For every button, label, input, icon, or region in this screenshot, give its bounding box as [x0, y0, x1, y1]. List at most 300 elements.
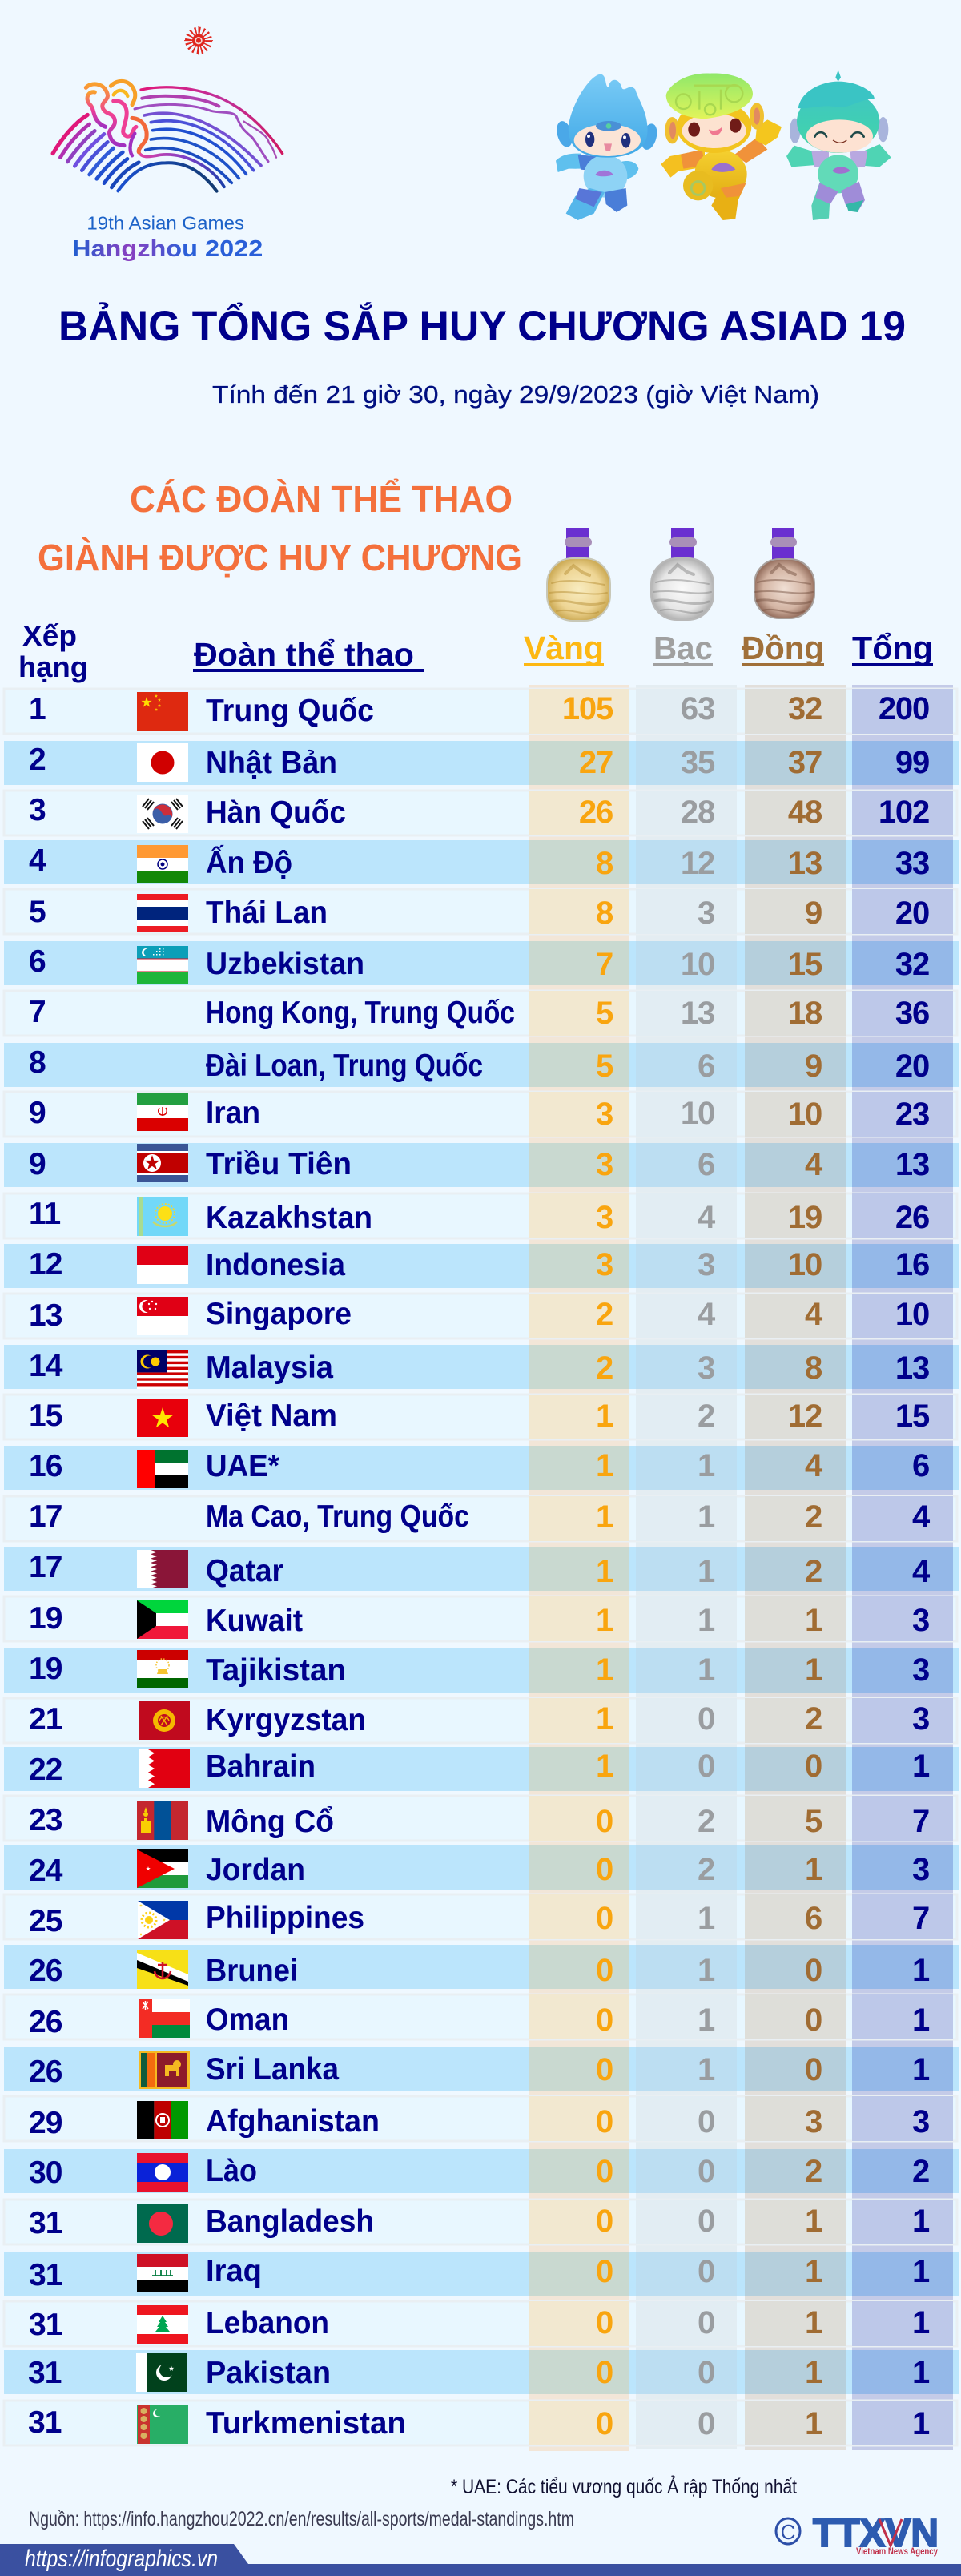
row: Pakistan: 0 [698, 2355, 714, 2390]
row: Singapore: 2 [596, 1297, 613, 1332]
row: UAE* [4, 1446, 959, 1490]
row: Việt Nam: 15 [29, 1399, 62, 1433]
row: Tajikistan: 1 [698, 1652, 715, 1688]
flag: Japan [137, 743, 188, 782]
row: Kazakhstan: 26 [895, 1200, 929, 1235]
flag: Brunei [137, 1950, 188, 1989]
row: Bangladesh: Bangladesh [206, 2204, 374, 2239]
row: Sri Lanka: 26 [29, 2055, 62, 2089]
flag: Singapore [137, 1297, 188, 1335]
row: Indonesia: 16 [895, 1247, 929, 1282]
row: Singapore: 13 [29, 1298, 62, 1333]
flag: Turkmenistan [137, 2405, 188, 2444]
row: Việt Nam: 2 [698, 1399, 714, 1434]
row: Ấn Độ: Ấn Độ [206, 845, 292, 880]
row: Indonesia: 3 [698, 1247, 714, 1282]
flag: Vietnam [137, 1399, 188, 1437]
row: Bangladesh: 0 [698, 2204, 714, 2239]
row: Kyrgyzstan: 1 [596, 1701, 613, 1737]
row: Bahrain: 0 [698, 1749, 714, 1784]
row: Iran: 23 [895, 1097, 929, 1132]
row: UAE*: 1 [698, 1448, 715, 1483]
row: Iraq: 0 [698, 2254, 714, 2289]
row: Lebanon: 0 [596, 2305, 613, 2341]
row: Lào: 2 [805, 2154, 822, 2189]
row: Trung Quốc: 1 [29, 692, 46, 727]
row: Sri Lanka: Sri Lanka [206, 2052, 339, 2087]
flag: Pakistan [136, 2353, 187, 2392]
row: Kyrgyzstan: 2 [805, 1701, 822, 1737]
row: Việt Nam [4, 1395, 957, 1439]
row: Kyrgyzstan: Kyrgyzstan [206, 1703, 366, 1737]
row: Afghanistan: 3 [805, 2104, 822, 2139]
heading: các đoàn thể thao giành được huy chương [38, 478, 522, 578]
row: Singapore: 10 [895, 1297, 929, 1332]
row: Afghanistan: 0 [698, 2104, 714, 2139]
flag: Bahrain [139, 1749, 190, 1788]
row: Hàn Quốc: 28 [681, 795, 715, 830]
row: Mông Cổ: 5 [805, 1804, 822, 1839]
row: Philippines: 0 [596, 1901, 613, 1936]
table header: Xếp hạng [18, 619, 88, 683]
row: Indonesia: 3 [596, 1247, 613, 1282]
row: Iraq: 1 [805, 2254, 822, 2289]
flag: Philippines [138, 1901, 188, 1939]
row: Iraq: 0 [596, 2254, 613, 2289]
row: Kyrgyzstan: 0 [698, 1701, 714, 1737]
table header: Vàng: Vàng [524, 630, 604, 666]
medal table [4, 689, 959, 2445]
row: Ma Cao, Trung Quốc: Ma Cao, Trung Quốc [206, 1499, 469, 1534]
row: Sri Lanka: 1 [698, 2052, 715, 2087]
row: Sri Lanka: 0 [805, 2052, 822, 2087]
row: Turkmenistan: 1 [805, 2406, 822, 2441]
row: Hàn Quốc [4, 791, 957, 835]
row: Malaysia: Malaysia [206, 1350, 333, 1385]
row: Nhật Bản [4, 741, 959, 785]
row: Uzbekistan: 32 [895, 947, 929, 982]
row: Brunei: 1 [698, 1953, 715, 1988]
row: Đài Loan, Trung Quốc [4, 1043, 959, 1087]
row: Iran: 3 [596, 1097, 613, 1132]
column backgrounds: medals [529, 685, 953, 2451]
row: Sri Lanka: 1 [912, 2052, 930, 2087]
row: Turkmenistan [4, 2401, 957, 2445]
row: Kyrgyzstan: 3 [912, 1701, 929, 1737]
row: Turkmenistan: Turkmenistan [206, 2406, 406, 2441]
row: Malaysia: 2 [596, 1350, 613, 1386]
row: Tajikistan: 1 [805, 1652, 822, 1688]
icon: silver medal [651, 528, 714, 620]
row: Philippines: 25 [29, 1904, 62, 1938]
heading: các đoàn thể thao giành được huy chương: GIÀNH ĐƯỢC HUY CHƯƠNG [38, 537, 522, 578]
row: Afghanistan: 0 [596, 2104, 613, 2139]
row: Tajikistan: Tajikistan [206, 1653, 346, 1688]
row: Thái Lan: 20 [895, 896, 929, 931]
row: Thái Lan: 3 [698, 896, 714, 931]
row: Malaysia: 14 [29, 1349, 63, 1383]
row: Kazakhstan: 4 [698, 1200, 716, 1235]
table header: Xếp hạng: hạng [18, 650, 88, 683]
flag: South Korea [137, 795, 188, 833]
row: Qatar: Qatar [206, 1554, 283, 1588]
row: Lebanon: 31 [29, 2308, 62, 2342]
row: Bahrain: Bahrain [206, 1749, 316, 1784]
row: Thái Lan: 8 [596, 896, 613, 931]
row: Việt Nam: 1 [596, 1399, 613, 1434]
row: Malaysia: 8 [805, 1350, 822, 1386]
row: Ma Cao, Trung Quốc: 17 [29, 1499, 62, 1534]
row: Jordan: 2 [698, 1852, 714, 1887]
mascot: yellow Congcong [661, 73, 782, 220]
row: Jordan: Jordan [206, 1853, 305, 1887]
footnote: UAE: * UAE: Các tiểu vương quốc Ả rập Thống nhất [451, 2474, 797, 2498]
row: Hàn Quốc: 102 [879, 795, 929, 830]
row: Philippines: 7 [912, 1901, 929, 1936]
row: Trung Quốc: 200 [879, 691, 929, 727]
source: Nguồn: https://info.hangzhou2022.cn/en/results/all-sports/medal-standings.htm [29, 2508, 574, 2530]
row: Iran: 10 [681, 1096, 714, 1131]
row: Malaysia [4, 1345, 959, 1389]
title: BẢNG TỔNG SẮP HUY CHƯƠNG ASIAD 19 [58, 301, 906, 350]
row: UAE*: UAE* [206, 1449, 280, 1483]
row: Oman: 0 [805, 2002, 822, 2038]
row: Singapore [4, 1294, 957, 1338]
row: Việt Nam: 15 [895, 1399, 930, 1434]
row: Brunei [4, 1945, 959, 1989]
website url: https://infographics.vn [25, 2546, 218, 2572]
logo: TTXVN: C [781, 2520, 795, 2544]
row: Đài Loan, Trung Quốc: 6 [698, 1049, 714, 1084]
row: Mông Cổ: 0 [596, 1804, 613, 1839]
row: Uzbekistan: 7 [596, 947, 613, 982]
row: Kuwait: 1 [805, 1603, 822, 1638]
row: Oman: 1 [698, 2002, 715, 2038]
row: Iran: 9 [29, 1096, 46, 1130]
row: Hong Kong, Trung Quốc [4, 991, 957, 1036]
row: Kazakhstan: Kazakhstan [206, 1201, 372, 1235]
row: Bahrain: 1 [912, 1749, 930, 1784]
row: Brunei: 0 [596, 1953, 613, 1988]
row: Iraq: Iraq [206, 2254, 262, 2288]
row: Malaysia: 13 [895, 1350, 929, 1386]
row: Tajikistan [4, 1648, 959, 1693]
row: Kuwait [4, 1596, 957, 1641]
row: Kuwait: 1 [596, 1603, 613, 1638]
row: Jordan: 3 [912, 1852, 929, 1887]
row: Lào: 2 [912, 2154, 929, 2189]
row: Oman: 1 [912, 2002, 930, 2038]
row: Kazakhstan: 19 [788, 1200, 822, 1235]
row: Lào [4, 2149, 959, 2193]
row: Uzbekistan: 15 [788, 947, 822, 982]
row: Qatar: 1 [596, 1554, 613, 1589]
row: Tajikistan: 1 [596, 1652, 613, 1688]
logo: 19th Asian Games Hangzhou 2022 [53, 26, 283, 262]
row: Afghanistan [4, 2096, 957, 2141]
row: Kazakhstan: 3 [596, 1200, 613, 1235]
row: Afghanistan: 3 [912, 2104, 929, 2139]
row: Mông Cổ: 2 [698, 1804, 714, 1839]
row: Việt Nam: 12 [788, 1399, 822, 1434]
flag: Laos [137, 2153, 188, 2192]
row: Bahrain: 0 [805, 1749, 822, 1784]
row: Hàn Quốc: 3 [29, 793, 46, 827]
flag: Mongolia [137, 1801, 188, 1840]
row: Iran: 10 [788, 1097, 822, 1132]
row: Ma Cao, Trung Quốc: 1 [596, 1499, 613, 1535]
row: Hàn Quốc: 26 [579, 795, 613, 830]
row: Đài Loan, Trung Quốc: 8 [29, 1045, 46, 1080]
row: Afghanistan: Afghanistan [206, 2104, 380, 2139]
row: Jordan: 0 [596, 1852, 613, 1887]
row: Iran [4, 1092, 957, 1137]
row: Bahrain: 1 [596, 1749, 613, 1784]
row: Oman: 0 [596, 2002, 613, 2038]
logo emblem: red sun [184, 26, 213, 55]
row: Đài Loan, Trung Quốc: 5 [596, 1049, 613, 1084]
row: Iraq: 31 [29, 2258, 62, 2292]
row: Thái Lan [4, 889, 957, 934]
row: Qatar: 2 [805, 1554, 822, 1589]
table header: Xếp hạng: Xếp [22, 619, 77, 652]
row: Đài Loan, Trung Quốc: 20 [895, 1049, 929, 1084]
flag: Jordan [137, 1849, 188, 1888]
row: Iraq [4, 2252, 959, 2296]
row: Bangladesh [4, 2200, 957, 2244]
row: Triều Tiên: 13 [895, 1147, 929, 1182]
flag: Kuwait [137, 1600, 188, 1639]
row: Malaysia: 3 [698, 1350, 714, 1386]
row: Ấn Độ: 13 [788, 846, 822, 881]
row: Philippines: 6 [805, 1901, 822, 1936]
row: Bangladesh: 0 [596, 2204, 613, 2239]
row: Nhật Bản: Nhật Bản [206, 746, 337, 780]
row: Uzbekistan: 6 [29, 944, 46, 979]
row: Nhật Bản: 37 [788, 745, 822, 780]
flag: Thailand [137, 894, 188, 932]
row: Hong Kong, Trung Quốc: 36 [895, 996, 929, 1031]
flag: Bangladesh [137, 2204, 188, 2243]
row: Việt Nam: Việt Nam [206, 1399, 337, 1433]
row: Qatar: 1 [698, 1554, 715, 1589]
row: Oman: 26 [29, 2005, 62, 2039]
row: Mông Cổ: 7 [912, 1804, 929, 1839]
flag: Lebanon [137, 2305, 188, 2344]
row: Iran: Iran [206, 1096, 260, 1130]
row: Lào: 0 [698, 2154, 714, 2189]
row: Đài Loan, Trung Quốc: Đài Loan, Trung Quốc [206, 1049, 483, 1083]
flag: Kyrgyzstan [139, 1701, 190, 1740]
row: Kuwait: 3 [912, 1603, 929, 1638]
row: Thái Lan: 9 [805, 896, 822, 931]
flag: Uzbekistan [137, 946, 188, 984]
row: Indonesia: 10 [788, 1247, 822, 1282]
row: Trung Quốc: 63 [681, 691, 714, 727]
row: Turkmenistan: 0 [596, 2406, 613, 2441]
row: Ma Cao, Trung Quốc: 4 [912, 1499, 931, 1535]
row: Ấn Độ: 8 [596, 846, 613, 881]
row: Philippines [4, 1894, 957, 1939]
icon: bronze medal [754, 528, 814, 618]
table header: Đoàn thể thao: Đoàn thể thao [194, 636, 414, 673]
row: Turkmenistan: 31 [28, 2405, 62, 2440]
table header: Bạc: Bạc [653, 630, 713, 666]
mascot: green Lianlian [786, 70, 891, 220]
row: Lào: 30 [29, 2155, 62, 2190]
row: Kuwait: Kuwait [206, 1604, 303, 1638]
flag: Iran [137, 1093, 188, 1131]
row: Jordan: 1 [805, 1852, 822, 1887]
flag: Indonesia [137, 1246, 188, 1284]
row: Lebanon: 1 [805, 2305, 822, 2341]
row: Kazakhstan [4, 1193, 957, 1238]
row: Triều Tiên: 3 [596, 1147, 613, 1182]
row: Pakistan: 0 [596, 2355, 613, 2390]
flag: Afghanistan [137, 2101, 188, 2139]
row: Triều Tiên [4, 1143, 959, 1187]
heading: các đoàn thể thao giành được huy chương: CÁC ĐOÀN THỂ THAO [130, 478, 513, 520]
row: Trung Quốc: 32 [788, 691, 822, 727]
row: Oman: Oman [206, 2002, 289, 2037]
row: Triều Tiên: 9 [29, 1147, 46, 1181]
row: Lào: 0 [596, 2154, 613, 2189]
row: Triều Tiên: Triều Tiên [206, 1147, 352, 1181]
row: Jordan: 24 [29, 1854, 63, 1888]
logo: TTXVN: TTXVN [813, 2512, 939, 2555]
icon: gold medal [547, 528, 610, 621]
logo: TTXVN: Vietnam News Agency [856, 2546, 938, 2557]
row: Brunei: 1 [912, 1953, 930, 1988]
row: Hong Kong, Trung Quốc: 18 [788, 996, 822, 1031]
row: Sri Lanka [4, 2047, 959, 2091]
row: Uzbekistan: Uzbekistan [206, 947, 364, 981]
footer bar [0, 2544, 961, 2576]
logo text: 19th Asian Games: 19th Asian Games [86, 213, 244, 234]
row: Lebanon [4, 2301, 957, 2346]
row: Qatar: 4 [912, 1554, 931, 1589]
row: Brunei: 26 [29, 1954, 62, 1988]
table header: Đồng: Đồng [742, 630, 824, 666]
mascot: blue Chenchen [554, 74, 660, 220]
row: UAE*: 1 [596, 1448, 613, 1483]
row: Hong Kong, Trung Quốc: Hong Kong, Trung Quốc [206, 996, 515, 1030]
row: UAE*: 4 [805, 1448, 823, 1483]
row: Hàn Quốc: Hàn Quốc [206, 795, 346, 830]
flag: Oman [139, 1999, 190, 2038]
logo emblem: fan and waves [53, 81, 283, 191]
row: Kuwait: 1 [698, 1603, 715, 1638]
row: Hong Kong, Trung Quốc: 13 [681, 996, 714, 1031]
row: Philippines: Philippines [206, 1901, 364, 1935]
row: Turkmenistan: 1 [912, 2406, 930, 2441]
row: Thái Lan: Thái Lan [206, 896, 328, 930]
row: Trung Quốc [4, 689, 957, 734]
row: Nhật Bản: 27 [579, 745, 613, 780]
row: Kyrgyzstan: 21 [29, 1702, 62, 1737]
row: Uzbekistan [4, 941, 959, 985]
row: Lào: Lào [206, 2154, 257, 2188]
row: Pakistan: 31 [28, 2356, 62, 2390]
row: Singapore: Singapore [206, 1297, 352, 1331]
row: Trung Quốc: 105 [562, 691, 613, 727]
row: Jordan [4, 1845, 959, 1890]
row: Triều Tiên: 6 [698, 1147, 714, 1182]
row: UAE*: 6 [912, 1448, 929, 1483]
row: Bangladesh: 1 [912, 2204, 930, 2239]
row: Singapore: 4 [698, 1297, 716, 1332]
table header: Tổng: Tổng [852, 630, 933, 666]
row: Iraq: 1 [912, 2254, 930, 2289]
row: Hàn Quốc: 48 [788, 795, 822, 830]
row: Ấn Độ: 33 [895, 846, 929, 881]
flag: Tajikistan [137, 1650, 188, 1688]
row: Hong Kong, Trung Quốc: 5 [596, 996, 613, 1031]
row: Brunei: Brunei [206, 1954, 298, 1988]
row: Pakistan [4, 2350, 959, 2394]
row: Lebanon: 1 [912, 2305, 930, 2341]
row: Bangladesh: 1 [805, 2204, 822, 2239]
row: Ma Cao, Trung Quốc: 2 [805, 1499, 822, 1535]
row: Turkmenistan: 0 [698, 2406, 714, 2441]
row: Philippines: 1 [698, 1901, 715, 1936]
row: Bahrain: 22 [29, 1753, 62, 1787]
row: Qatar: 17 [29, 1550, 62, 1584]
flag: Sri Lanka [139, 2051, 190, 2089]
row: Indonesia [4, 1244, 959, 1288]
row: Triều Tiên: 4 [805, 1147, 823, 1182]
row: Sri Lanka: 0 [596, 2052, 613, 2087]
row: Ấn Độ: 4 [29, 843, 46, 878]
row: Hong Kong, Trung Quốc: 7 [29, 995, 46, 1029]
row: Oman [4, 1994, 957, 2039]
row: Singapore: 4 [805, 1297, 823, 1332]
flag: North Korea [137, 1144, 188, 1182]
row: Afghanistan: 29 [29, 2106, 62, 2140]
row: Nhật Bản: 35 [681, 745, 715, 780]
flag: Malaysia [137, 1350, 188, 1389]
row: Kazakhstan: 11 [29, 1197, 61, 1231]
row: Pakistan: 1 [805, 2355, 822, 2390]
row: Uzbekistan: 10 [681, 947, 714, 982]
subtitle: date: Tính đến 21 giờ 30, ngày 29/9/2023 (giờ Việt Nam) [212, 380, 819, 409]
row: Kuwait: 19 [29, 1601, 62, 1636]
mascots [554, 70, 891, 220]
row: Lebanon: Lebanon [206, 2306, 329, 2341]
row: Đài Loan, Trung Quốc: 9 [805, 1049, 822, 1084]
row: Nhật Bản: 2 [29, 743, 46, 777]
flag: Kazakhstan [137, 1197, 188, 1236]
row: Ma Cao, Trung Quốc [4, 1496, 957, 1541]
row: Tajikistan: 19 [29, 1652, 62, 1686]
row: Mông Cổ [4, 1796, 957, 1841]
row: Nhật Bản: 99 [895, 745, 929, 780]
row: Indonesia: Indonesia [206, 1248, 345, 1282]
row: Trung Quốc: Trung Quốc [206, 694, 374, 728]
row: Mông Cổ: 23 [29, 1803, 62, 1837]
row: Bahrain [4, 1747, 959, 1791]
row: Bangladesh: 31 [29, 2206, 62, 2240]
flag: Qatar [137, 1550, 188, 1588]
logo text: Hangzhou 2022: Hangzhou 2022 [72, 236, 263, 262]
row: Pakistan: 1 [912, 2355, 930, 2390]
flag: UAE [137, 1450, 188, 1488]
row: Thái Lan: 5 [29, 895, 46, 929]
flag: China [137, 692, 188, 731]
row: Qatar [4, 1547, 959, 1591]
flag: India [137, 845, 188, 883]
row: Mông Cổ: Mông Cổ [206, 1805, 334, 1839]
